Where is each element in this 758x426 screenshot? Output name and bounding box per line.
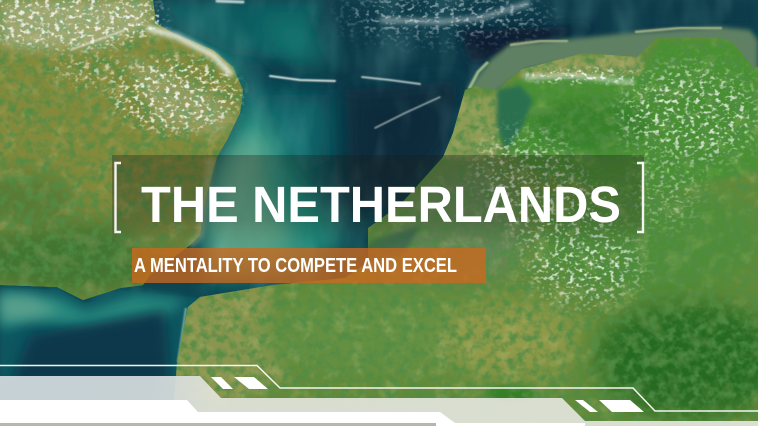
right bracket [637,163,643,232]
wispy sea streaks [217,1,440,128]
left bracket [116,163,121,232]
groningen [520,55,650,80]
english channel [0,288,200,380]
subtitle: A MENTALITY TO COMPETE AND EXCEL [134,255,457,277]
parallelogram accents left [211,377,268,389]
dark title band [112,155,644,248]
north holland polder [440,95,500,160]
translucent panel [0,376,758,426]
white layer [0,400,585,426]
thin outline stroke [0,366,758,411]
ijsselmeer [497,85,533,150]
parallelogram accents right [575,400,644,412]
netherlands green [500,40,758,200]
northern dark water [150,0,758,215]
bottom decorative graphic [0,366,758,426]
wadden sea and islands [468,27,758,140]
grey footer strip [0,423,436,426]
coastal muddy water [190,158,212,245]
title: THE NETHERLANDS [141,176,621,233]
river delta [350,226,420,262]
orange subtitle bar [132,248,486,283]
france and belgium [176,286,286,398]
teal channel water [156,25,345,280]
